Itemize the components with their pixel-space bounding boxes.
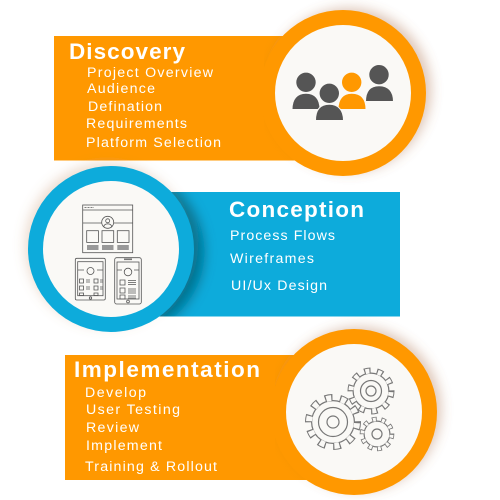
icon: wireframes xyxy=(75,205,141,304)
conception banner xyxy=(150,192,400,316)
discovery list xyxy=(86,65,221,151)
browser window xyxy=(83,205,133,253)
discovery heading: Discovery xyxy=(69,39,185,64)
conception list xyxy=(230,228,335,294)
conception heading: Conception xyxy=(229,197,364,222)
panel: conception xyxy=(25,163,400,336)
implementation list: Review xyxy=(86,420,140,436)
implementation banner cover xyxy=(65,355,275,480)
discovery banner cover xyxy=(54,36,264,160)
implementation list: Training & Rollout xyxy=(85,459,217,475)
implementation list: Develop xyxy=(85,385,146,401)
implementation banner xyxy=(65,355,315,480)
phone xyxy=(115,258,141,304)
tablet xyxy=(75,258,105,300)
panel: implementation xyxy=(65,327,441,491)
conception list: Wireframes xyxy=(230,251,314,267)
implementation heading: Implementation xyxy=(74,357,260,382)
top gear xyxy=(350,370,392,412)
implementation list: User Testing xyxy=(86,402,180,418)
discovery list: Defination xyxy=(88,99,162,115)
large gear xyxy=(308,398,358,446)
icon: people xyxy=(292,64,394,120)
discovery list: Project Overview xyxy=(87,65,214,81)
discovery circle xyxy=(268,18,418,168)
implementation circle xyxy=(278,336,430,488)
conception banner shadow xyxy=(160,192,211,316)
implementation list: Implement xyxy=(86,438,162,454)
conception circle xyxy=(36,174,186,324)
conception list: UI/Ux Design xyxy=(231,278,327,294)
implementation list xyxy=(85,385,217,475)
discovery banner xyxy=(54,36,304,160)
panel: discovery xyxy=(54,8,431,172)
discovery list: Audience xyxy=(87,81,155,97)
icon: gears xyxy=(308,370,392,449)
discovery circle shadow xyxy=(267,8,431,172)
conception circle glow xyxy=(25,163,189,327)
small gear xyxy=(362,419,392,449)
discovery list: Requirements xyxy=(86,116,187,132)
implementation circle shadow xyxy=(277,327,441,491)
discovery list: Platform Selection xyxy=(86,135,221,151)
conception list: Process Flows xyxy=(230,228,335,244)
